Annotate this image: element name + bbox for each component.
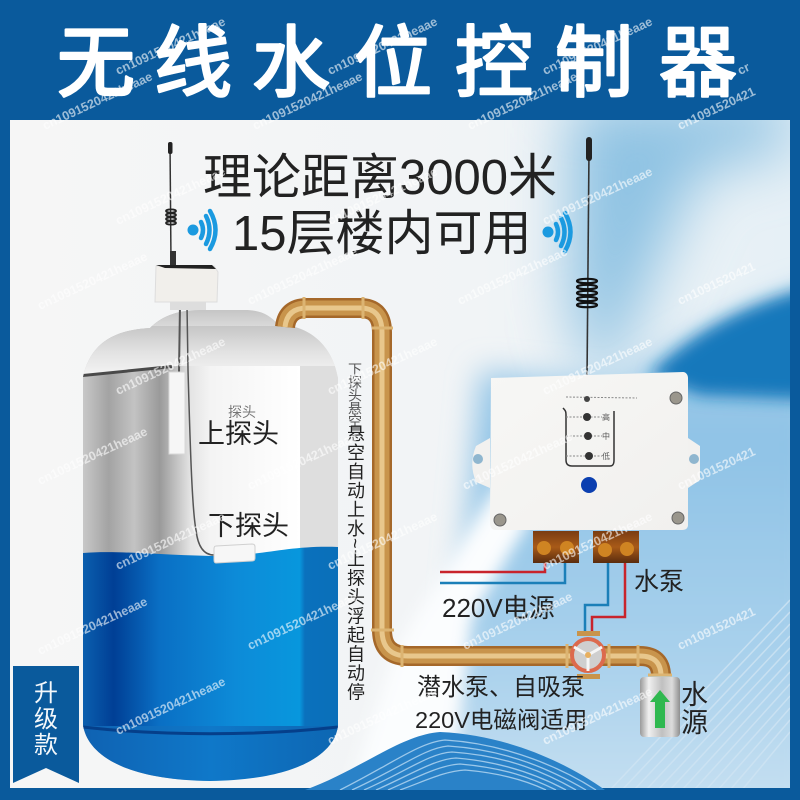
- text: wire labels: 220V电源: [442, 593, 555, 623]
- beaker level icon: 高: [602, 412, 610, 422]
- beaker level icon: [563, 396, 637, 466]
- watermarks: cn1091520421heaae: [113, 164, 228, 228]
- title: 无: [57, 19, 135, 107]
- upper probe and wire: [169, 305, 214, 555]
- water source cylinder: [640, 677, 680, 737]
- watermarks: cn1091520421heaae: [113, 674, 228, 738]
- text: water source: 源: [681, 708, 708, 738]
- icon: left wifi signal: [188, 211, 216, 249]
- wires: [440, 563, 625, 632]
- indicator light: [581, 477, 597, 493]
- sensor head with antenna: [155, 142, 218, 310]
- badge: upgraded: [13, 666, 79, 783]
- watermarks: cn1091520421heaae: [113, 509, 228, 573]
- antenna: [577, 137, 597, 380]
- text: probe labels: 下探头: [208, 511, 289, 541]
- watermarks: cn1091520421heaae: [35, 594, 150, 658]
- watermarks: cn1091520421heaae: [325, 509, 440, 573]
- badge: upgraded: 级: [34, 706, 58, 733]
- title: 水: [252, 19, 330, 107]
- watermarks: cn1091520421heaae: [245, 429, 360, 493]
- text: probe labels: [198, 404, 289, 541]
- watermarks: cn1091520421heaae: [455, 244, 570, 308]
- watermarks: cn1091520421heaae: [540, 164, 655, 228]
- solenoid valve: [572, 631, 604, 679]
- text: applicable pumps: 220V电磁阀适用: [415, 707, 587, 733]
- watermarks: cn1091520421heaae: [113, 334, 228, 398]
- watermarks: cn1091520421heaae: [460, 429, 575, 493]
- badge: upgraded: 升: [34, 680, 58, 707]
- text: probe labels: 上探头: [198, 419, 279, 449]
- watermarks: cn1091520421heaae: [40, 69, 155, 133]
- lower probe float: [214, 544, 255, 563]
- title: 线: [154, 19, 232, 107]
- icon: right wifi signal: [542, 213, 570, 251]
- watermarks: cn1091520421heaae: [540, 684, 655, 748]
- beaker level icon: 中: [602, 431, 610, 441]
- watermarks: cn1091520421heaae: [460, 589, 575, 653]
- box: [490, 372, 688, 530]
- text: probe labels: 探头: [228, 404, 256, 420]
- water: [83, 547, 338, 730]
- text: applicable pumps: 潜水泵、自吸泵: [417, 674, 585, 701]
- heading: range: 15层楼内可用: [232, 207, 532, 261]
- title: [57, 19, 737, 107]
- watermarks: cn1091520421heaae: [325, 164, 440, 228]
- watermarks: cn1091520421: [675, 444, 758, 493]
- watermarks: cr: [735, 60, 752, 78]
- copper pipes: [285, 297, 672, 676]
- wireless controller: [472, 137, 700, 563]
- beaker level icon: 低: [602, 451, 610, 461]
- watermarks: cn1091520421heaae: [325, 684, 440, 748]
- watermarks: cn1091520421heaae: [465, 69, 580, 133]
- swoosh: bottom wave: [306, 732, 605, 790]
- tank: [83, 305, 340, 786]
- watermarks: cn1091520421heaae: [250, 69, 365, 133]
- watermarks: cn1091520421heaae: [540, 334, 655, 398]
- text: vertical note: 下探头悬空: [347, 362, 363, 427]
- heading: range: 理论距离3000米: [203, 151, 557, 205]
- title: 器: [659, 19, 737, 107]
- watermarks: cn1091520421heaae: [325, 14, 440, 78]
- title: 控: [455, 19, 533, 107]
- watermarks: cn1091520421heaae: [540, 14, 655, 78]
- text: water source: 水: [681, 680, 708, 710]
- title: 位: [354, 19, 432, 107]
- title: 制: [555, 19, 633, 107]
- text: wire labels: [442, 568, 684, 623]
- mounting ears: [472, 438, 490, 488]
- watermarks: cn1091520421heaae: [245, 244, 360, 308]
- screws: [494, 392, 684, 526]
- watermarks: cn1091520421heaae: [35, 249, 150, 313]
- watermarks: cn1091520421heaae: [325, 334, 440, 398]
- text: wire labels: 水泵: [634, 568, 684, 596]
- terminals: [533, 531, 639, 563]
- text: water source: [681, 680, 708, 738]
- watermarks: cn1091520421heaae: [113, 14, 228, 78]
- watermarks: cn1091520421: [675, 259, 758, 308]
- text: vertical note: 悬空自动上水~上探头浮起自动停: [345, 424, 365, 702]
- badge: upgraded: 款: [34, 732, 58, 759]
- watermarks: cn1091520421heaae: [245, 589, 360, 653]
- watermarks: cn1091520421heaae: [35, 424, 150, 488]
- watermarks: cn1091520421heaae: [540, 509, 655, 573]
- heading: range: [203, 151, 557, 261]
- text: applicable pumps: [415, 674, 587, 733]
- watermarks: cn1091520421: [675, 604, 758, 653]
- watermarks: cn1091520421: [675, 84, 758, 133]
